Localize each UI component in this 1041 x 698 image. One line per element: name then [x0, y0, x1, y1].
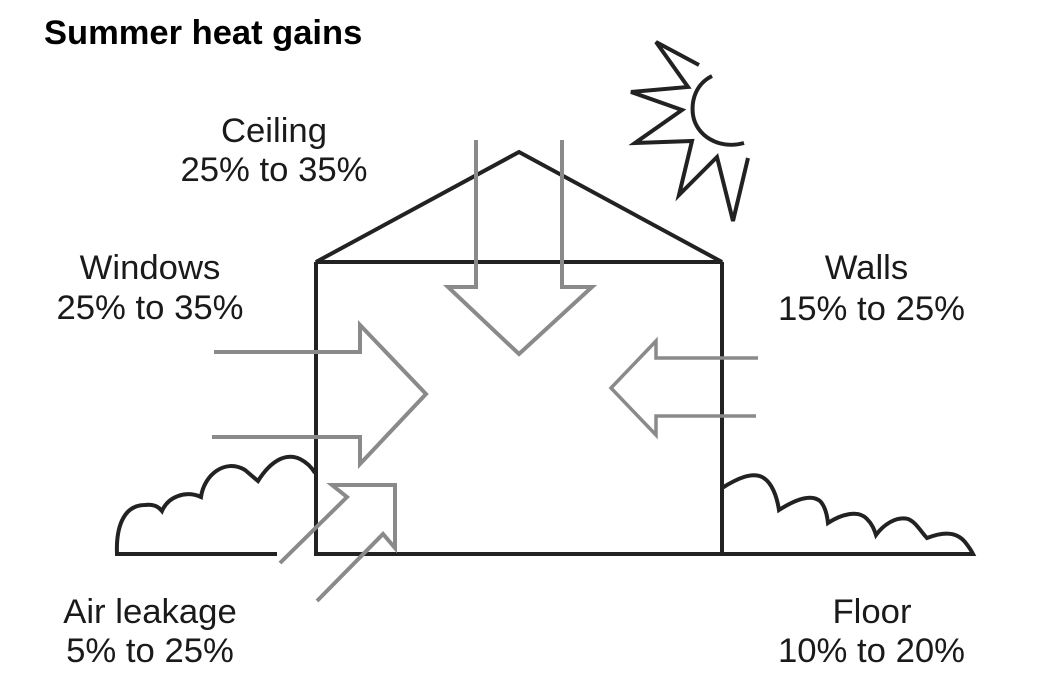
arrow: windows heat gain: [212, 325, 426, 464]
label: ceiling: 25% to 35%: [180, 151, 368, 189]
icon: sun: [631, 42, 748, 221]
arrow: walls heat gain: [611, 341, 758, 435]
label: floor: Floor: [832, 593, 912, 631]
label: windows: 25% to 35%: [56, 289, 244, 327]
label: floor: 10% to 20%: [778, 632, 965, 670]
right bush: [722, 475, 973, 554]
house outline: [316, 152, 722, 554]
left bush: [117, 457, 315, 554]
label: walls: [778, 249, 965, 328]
label: windows: Windows: [80, 249, 220, 287]
label: air leakage: Air leakage: [63, 593, 237, 631]
label: walls: 15% to 25%: [778, 290, 965, 328]
title: Summer heat gains: [44, 14, 362, 52]
label: air leakage: 5% to 25%: [66, 632, 234, 670]
arrow: air leakage heat gain: [280, 485, 395, 601]
label: walls: Walls: [825, 249, 908, 287]
label: air leakage: [63, 593, 237, 670]
arrow: ceiling heat gain: [448, 140, 592, 354]
label: windows: [56, 249, 244, 327]
label: floor: [778, 593, 965, 670]
label: ceiling: [180, 112, 368, 189]
label: ceiling: Ceiling: [221, 112, 327, 150]
